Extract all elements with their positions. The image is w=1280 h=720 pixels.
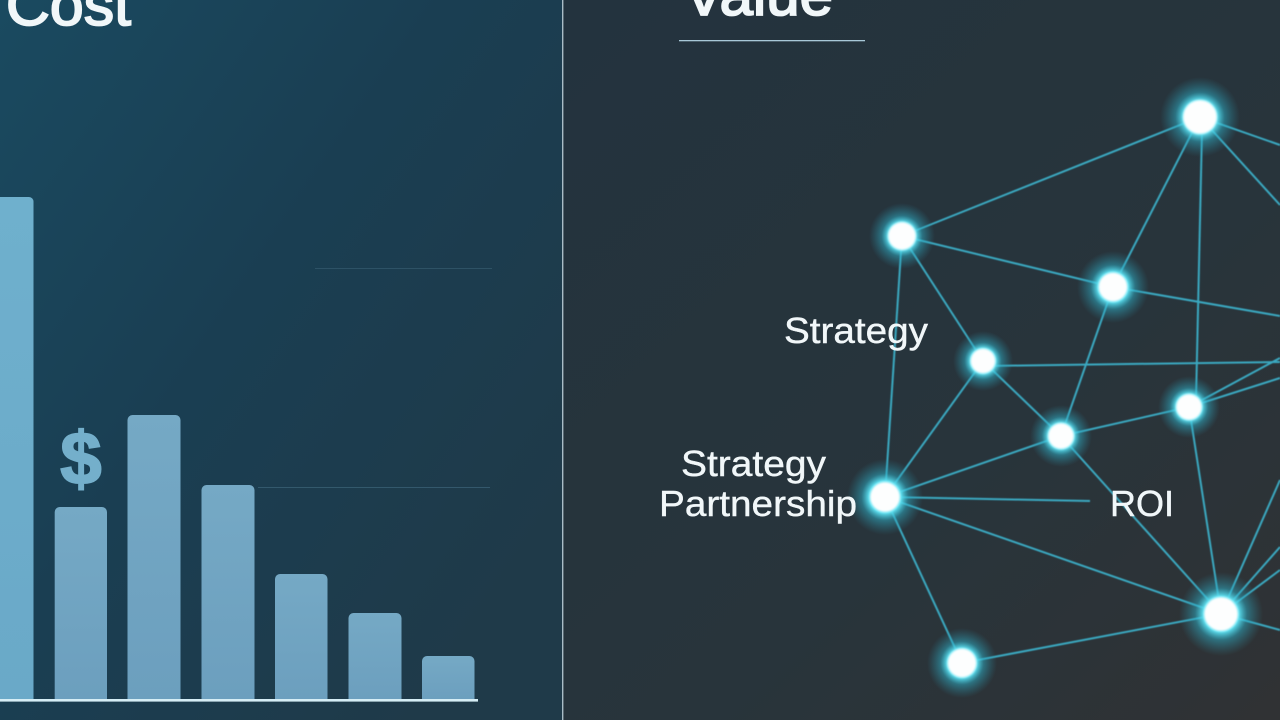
node: bottom: [927, 628, 997, 698]
node: upper left: [869, 203, 935, 269]
bar 4: [202, 485, 254, 699]
bar chart: cost: [0, 197, 492, 702]
panel: value background: [563, 0, 1280, 720]
network graph: [847, 77, 1280, 698]
label: ROI: ROI: [1110, 483, 1174, 524]
network links: [885, 117, 1280, 663]
bar 2: [55, 507, 107, 699]
bar 6: [348, 613, 402, 699]
bar 1: [0, 197, 34, 699]
center divider: [562, 0, 563, 720]
node: middle right: [1158, 376, 1220, 438]
chart baseline: [0, 699, 478, 702]
node: middle left: [953, 331, 1013, 391]
node: upper center: [1077, 251, 1149, 323]
label: Strategy Partnership: Partnership: [659, 483, 857, 524]
panel: cost background: [0, 0, 563, 720]
node: top: [1160, 77, 1240, 157]
bar 7: [422, 656, 474, 699]
heading underline: [679, 40, 865, 41]
icon: dollar sign: $: [60, 417, 102, 500]
bar 3: [128, 415, 180, 699]
node: partnership: [847, 459, 923, 535]
label: Strategy Partnership: [659, 443, 857, 524]
label: Strategy: Strategy: [784, 310, 928, 351]
bar 5: [275, 574, 328, 699]
label: Strategy Partnership: Strategy: [681, 443, 826, 484]
node: lower right: [1179, 572, 1263, 656]
node: center: [1030, 405, 1092, 467]
